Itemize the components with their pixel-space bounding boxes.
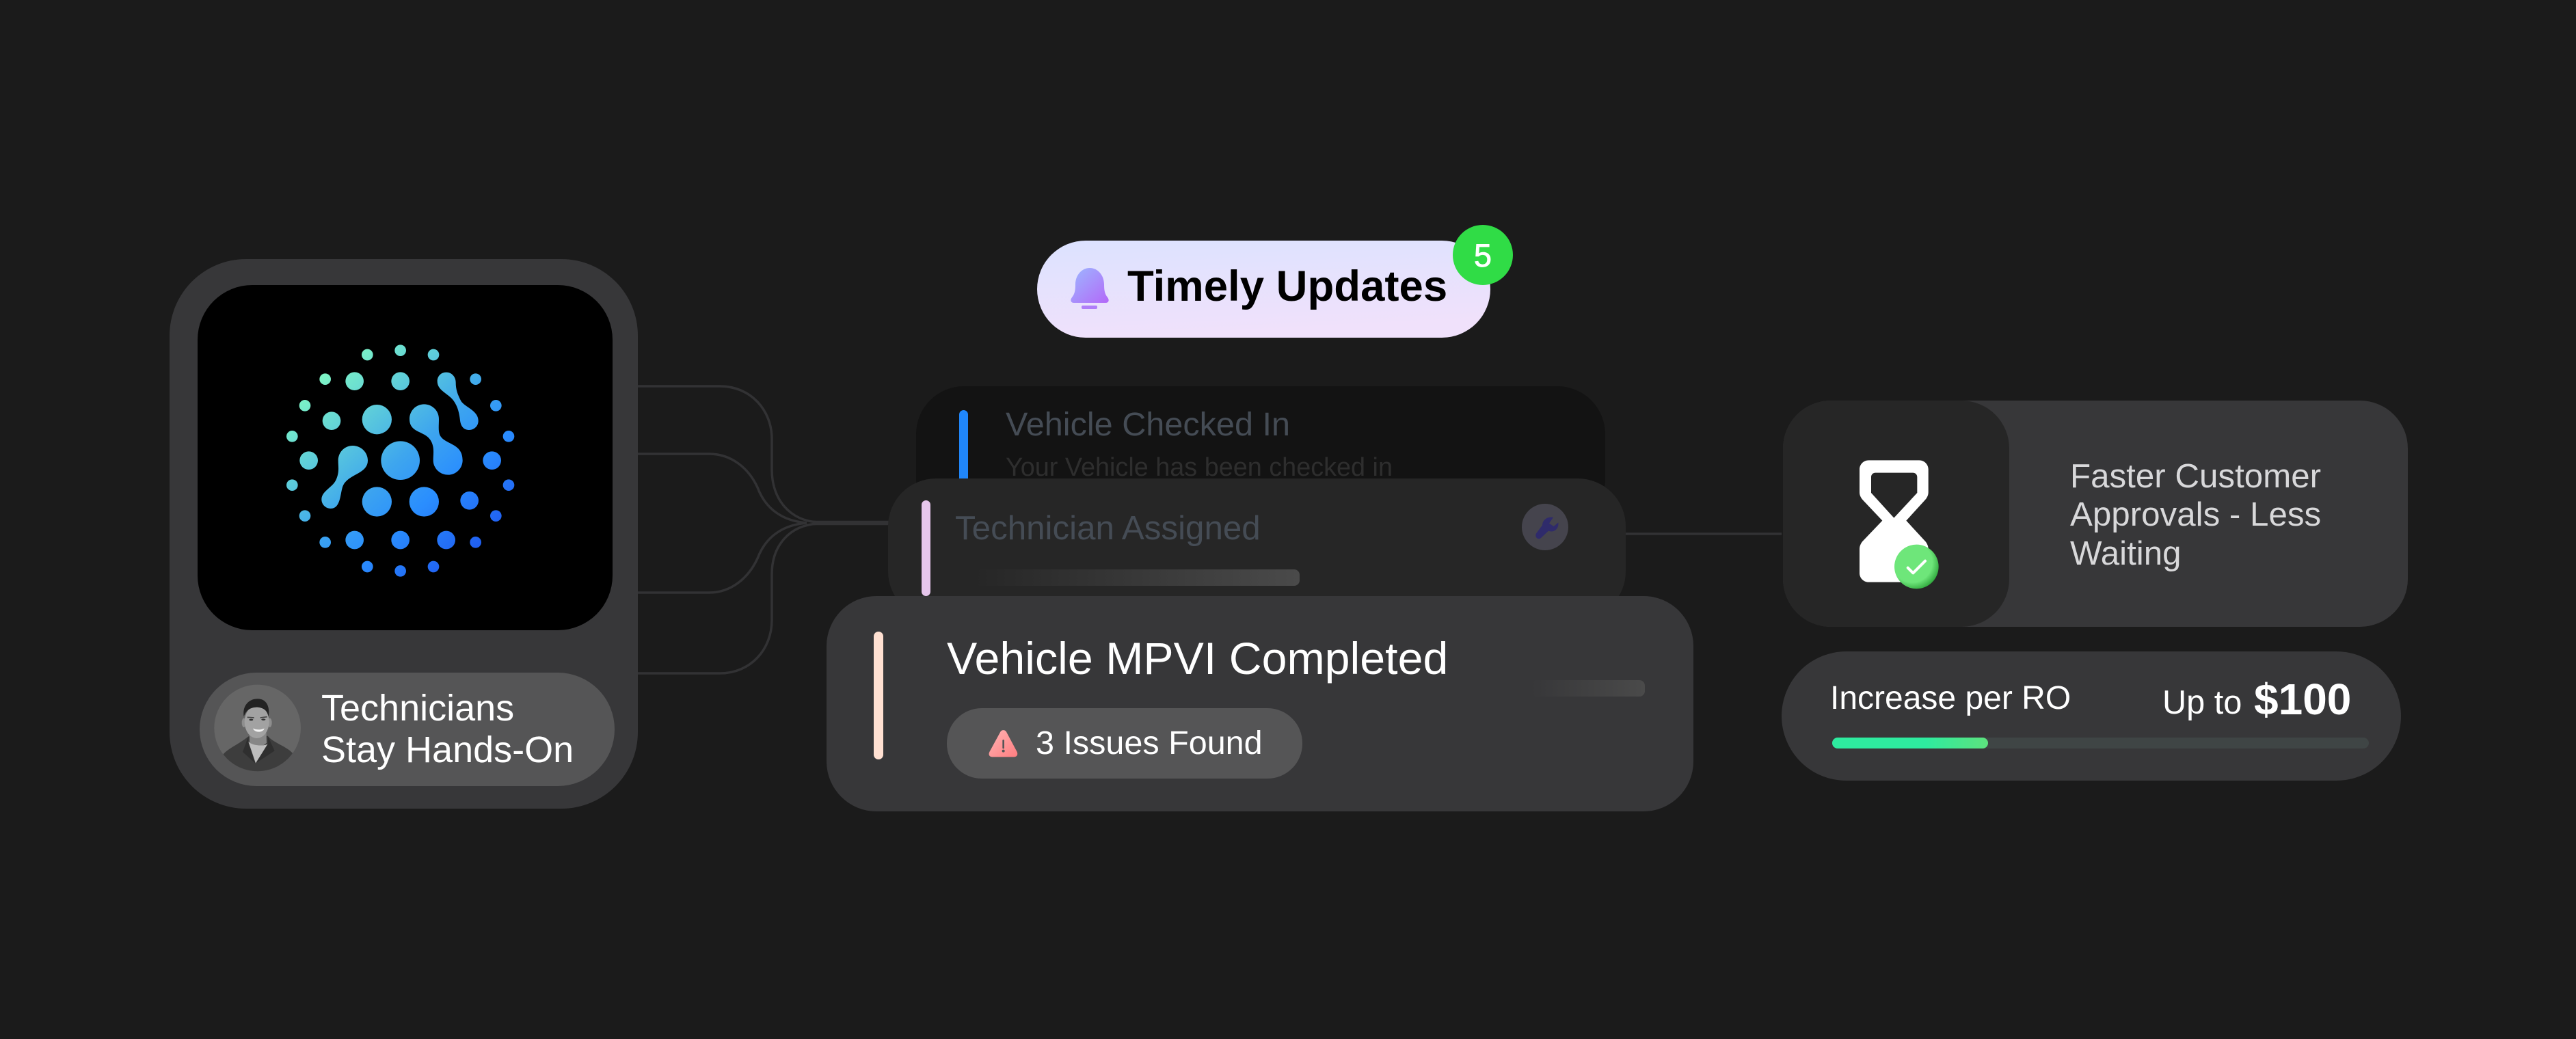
notification count badge (1453, 225, 1513, 285)
connector lines: technician panel to notification cards (638, 386, 889, 673)
label: Technicians Stay Hands-On: Technicians (321, 688, 514, 729)
notification count badge: 5 (1474, 237, 1492, 273)
label: 3 Issues Found: 3 Issues Found (1036, 725, 1263, 761)
status bar: blue (959, 410, 968, 513)
text: Faster Customer Approvals - Less Waiting: Approvals - Less (2070, 496, 2321, 533)
placeholder progress bar (974, 569, 1300, 586)
card title: Technician Assigned (955, 509, 1261, 547)
panel: faster customer approvals (1783, 401, 2408, 627)
panel: technicians (170, 259, 638, 809)
icon: bell (1071, 268, 1109, 309)
card subtitle: Your Vehicle has been checked in (1006, 453, 1393, 482)
icon: warning triangle (989, 730, 1017, 757)
card: Technician Assigned (888, 478, 1626, 619)
technician label pill (200, 673, 615, 786)
heading: Timely Updates: Timely Updates (1127, 262, 1447, 310)
card title: Vehicle Checked In (1006, 406, 1290, 443)
icon: hourglass with check (1860, 460, 1939, 589)
badge pill: Timely Updates (1037, 225, 1513, 338)
panel: increase per RO (1782, 651, 2401, 781)
placeholder progress bar (1531, 680, 1645, 697)
status bar: peach (874, 632, 883, 759)
card title: Vehicle MPVI Completed (947, 634, 1448, 684)
card: Vehicle Checked In (916, 386, 1605, 527)
label: Technicians Stay Hands-On: Stay Hands-On (321, 729, 574, 770)
status bar: pink (922, 500, 930, 596)
value: Up to $100: $100 (2254, 675, 2351, 724)
card: Vehicle MPVI Completed (827, 596, 1693, 811)
connector line: notification cards to approvals panel (1620, 532, 1782, 535)
label: Increase per RO: Increase per RO (1830, 680, 2071, 716)
app tile (198, 285, 613, 630)
text: Faster Customer Approvals - Less Waiting: Waiting (2070, 535, 2182, 572)
avatar: technician portrait (214, 685, 301, 774)
value: Up to $100: Up to (2162, 684, 2242, 721)
progress bar (1832, 738, 2369, 748)
icon: wrench (1522, 504, 1568, 550)
issues pill (947, 708, 1302, 779)
icon tile (1783, 401, 2009, 627)
value: Up to $100 (2162, 675, 2351, 724)
text: Faster Customer Approvals - Less Waiting: Faster Customer (2070, 457, 2321, 495)
icon: dotted sphere logo (286, 345, 514, 577)
